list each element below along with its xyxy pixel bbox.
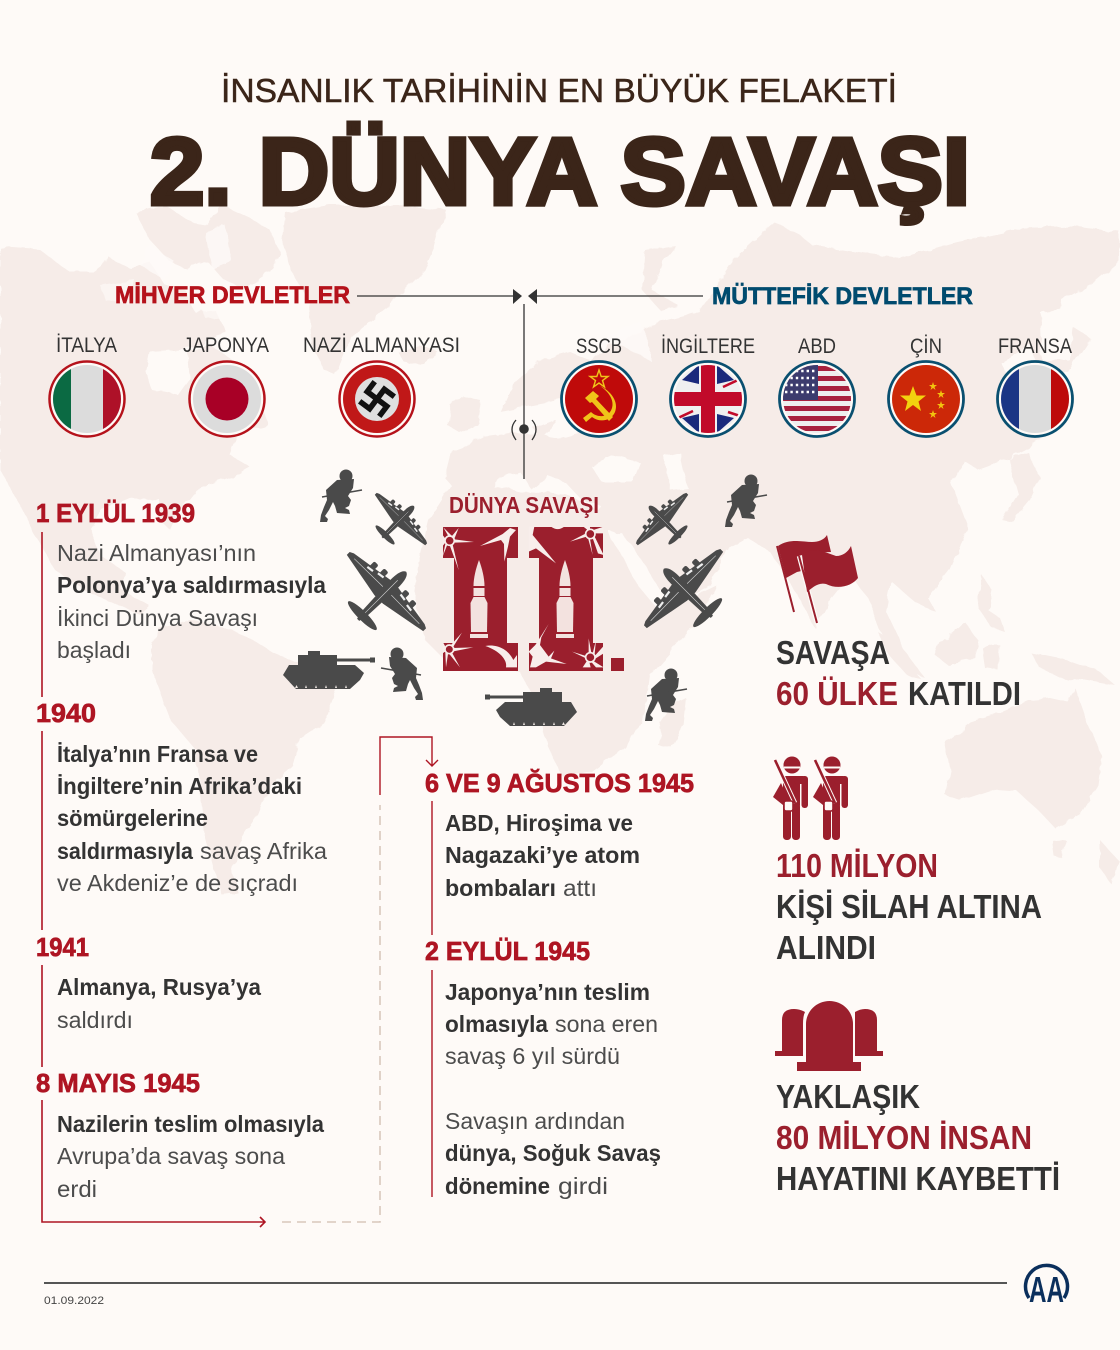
icon: plane small left xyxy=(357,481,439,563)
icon: flags xyxy=(777,535,858,623)
world map xyxy=(0,205,1120,895)
stat: countries: SAVAŞA xyxy=(776,634,890,671)
flag: UK xyxy=(670,362,746,436)
emblem: Roman numeral II with bullets xyxy=(443,527,624,671)
label: world war: DÜNYA SAVAŞI xyxy=(449,492,599,518)
flag: Nazi Germany xyxy=(340,362,414,436)
stat: mobilised: ALINDI xyxy=(776,929,876,966)
label: USA: ABD xyxy=(798,335,836,358)
icon: plane large left xyxy=(320,534,444,658)
title: 2. DÜNYA SAVAŞI xyxy=(150,119,970,225)
timeline: 8 Mayıs 1945: Avrupa’da savaş sona xyxy=(57,1143,286,1169)
logo: AA: AA xyxy=(1029,1269,1064,1310)
timeline: 1 Eylül 1939: Nazi Almanyası’nın xyxy=(57,540,256,566)
timeline: 1 Eylül 1939: Polonya’ya saldırmasıyla xyxy=(57,572,327,598)
timeline: 6 ve 9 Ağustos 1945: Nagazaki’ye atom xyxy=(445,842,640,868)
timeline: 6 ve 9 Ağustos 1945: ABD, Hiroşima ve xyxy=(445,810,633,836)
timeline: 1940: saldırmasıyla xyxy=(57,838,194,864)
timeline: 1940: sömürgelerine xyxy=(57,805,208,831)
heading: axis powers: MİHVER DEVLETLER xyxy=(115,282,350,309)
label: UK: İNGİLTERE xyxy=(661,335,755,358)
flag: Italy xyxy=(50,362,124,436)
timeline: 2 Eylül 1945 xyxy=(425,936,661,1199)
label: China: ÇİN xyxy=(910,335,942,358)
timeline: 2 Eylül 1945: 2 EYLÜL 1945 xyxy=(425,936,590,966)
timeline: 8 Mayıs 1945: Nazilerin teslim olmasıyla xyxy=(57,1111,325,1137)
label: France: FRANSA xyxy=(998,335,1072,358)
flag: USSR xyxy=(562,362,636,436)
flag: China xyxy=(888,362,964,436)
timeline: 1941: saldırdı xyxy=(57,1007,133,1033)
stat: countries xyxy=(776,634,1021,712)
stat: deaths: HAYATINI KAYBETTİ xyxy=(776,1160,1060,1197)
label: USSR: SSCB xyxy=(576,335,622,358)
timeline: 2 Eylül 1945: dünya, Soğuk Savaş xyxy=(445,1140,661,1166)
timeline: 1940: savaş Afrika xyxy=(200,838,328,864)
icon: plane large right xyxy=(626,531,750,655)
footer rule xyxy=(44,1282,1007,1284)
timeline: 6 ve 9 Ağustos 1945: 6 VE 9 AĞUSTOS 1945 xyxy=(425,768,694,798)
timeline: 8 Mayıs 1945: 8 MAYIS 1945 xyxy=(36,1068,200,1098)
icon: soldier 2 xyxy=(381,648,423,700)
timeline: 6 ve 9 Ağustos 1945 xyxy=(425,768,694,901)
icon: plane small right xyxy=(624,481,706,563)
stat: deaths: YAKLAŞIK xyxy=(776,1078,920,1115)
stat: countries: 60 ÜLKE xyxy=(776,675,898,712)
timeline: 2 Eylül 1945: savaş 6 yıl sürdü xyxy=(445,1043,620,1069)
label: Nazi Germany: NAZİ ALMANYASI xyxy=(303,334,460,357)
timeline: 1941 xyxy=(36,932,262,1033)
timeline: 2 Eylül 1945: Japonya’nın teslim xyxy=(445,979,650,1005)
timeline: 1940: ve Akdeniz’e de sıçradı xyxy=(57,870,298,896)
timeline: 2 Eylül 1945: sona eren xyxy=(555,1011,658,1037)
subtitle: İNSANLIK TARİHİNİN EN BÜYÜK FELAKETİ xyxy=(221,72,897,109)
timeline: 1941: 1941 xyxy=(36,932,89,962)
heading: allied powers: MÜTTEFİK DEVLETLER xyxy=(712,283,973,310)
timeline: 1 Eylül 1939: 1 EYLÜL 1939 xyxy=(36,498,195,528)
timeline: 2 Eylül 1945: dönemine xyxy=(445,1173,550,1199)
timeline: 1940: 1940 xyxy=(36,698,96,728)
stat: countries: KATILDI xyxy=(908,675,1021,712)
icon: gravestones xyxy=(775,1001,883,1071)
icon: soldier 3 xyxy=(725,474,767,527)
icon: tank right xyxy=(485,688,577,726)
timeline: 1 Eylül 1939 xyxy=(36,498,327,663)
timeline: 2 Eylül 1945: girdi xyxy=(558,1173,608,1199)
logo: AA xyxy=(1026,1265,1068,1310)
timeline: 1940: İngiltere’nin Afrika’daki xyxy=(57,773,302,799)
arrows: alliances to war xyxy=(357,289,703,479)
timeline: 1940: İtalya’nın Fransa ve xyxy=(57,741,258,767)
stat: mobilised: 110 MİLYON xyxy=(776,847,938,884)
timeline: 8 Mayıs 1945 xyxy=(36,1068,325,1202)
timeline: 1940 xyxy=(36,698,328,896)
timeline: 6 ve 9 Ağustos 1945: bombaları xyxy=(445,875,556,901)
label: Japan: JAPONYA xyxy=(183,334,269,357)
timeline: 6 ve 9 Ağustos 1945: attı xyxy=(563,875,597,901)
stat: mobilised: KİŞİ SİLAH ALTINA xyxy=(776,888,1042,925)
icon: soldier 1 xyxy=(320,470,362,522)
flag: Japan xyxy=(190,362,264,436)
timeline: 2 Eylül 1945: Savaşın ardından xyxy=(445,1108,625,1134)
timeline: 1941: Almanya, Rusya’ya xyxy=(57,974,262,1000)
stat: mobilised xyxy=(776,847,1042,966)
timeline connectors xyxy=(42,532,438,1227)
icon: soldiers xyxy=(773,756,848,840)
icon: soldier 4 xyxy=(645,668,687,721)
stat: deaths: 80 MİLYON İNSAN xyxy=(776,1119,1032,1156)
icon: tank left xyxy=(283,651,375,689)
stat: deaths xyxy=(776,1078,1060,1197)
map: inner seas xyxy=(100,225,1076,582)
label: Italy: İTALYA xyxy=(56,334,117,357)
flag: France xyxy=(998,362,1072,436)
timeline: 2 Eylül 1945: olmasıyla xyxy=(445,1011,549,1037)
timeline: 1 Eylül 1939: İkinci Dünya Savaşı xyxy=(57,605,258,631)
flag: USA xyxy=(780,362,854,436)
date: 01.09.2022 xyxy=(44,1295,104,1307)
timeline: 1 Eylül 1939: başladı xyxy=(57,637,131,663)
timeline: 8 Mayıs 1945: erdi xyxy=(57,1176,97,1202)
